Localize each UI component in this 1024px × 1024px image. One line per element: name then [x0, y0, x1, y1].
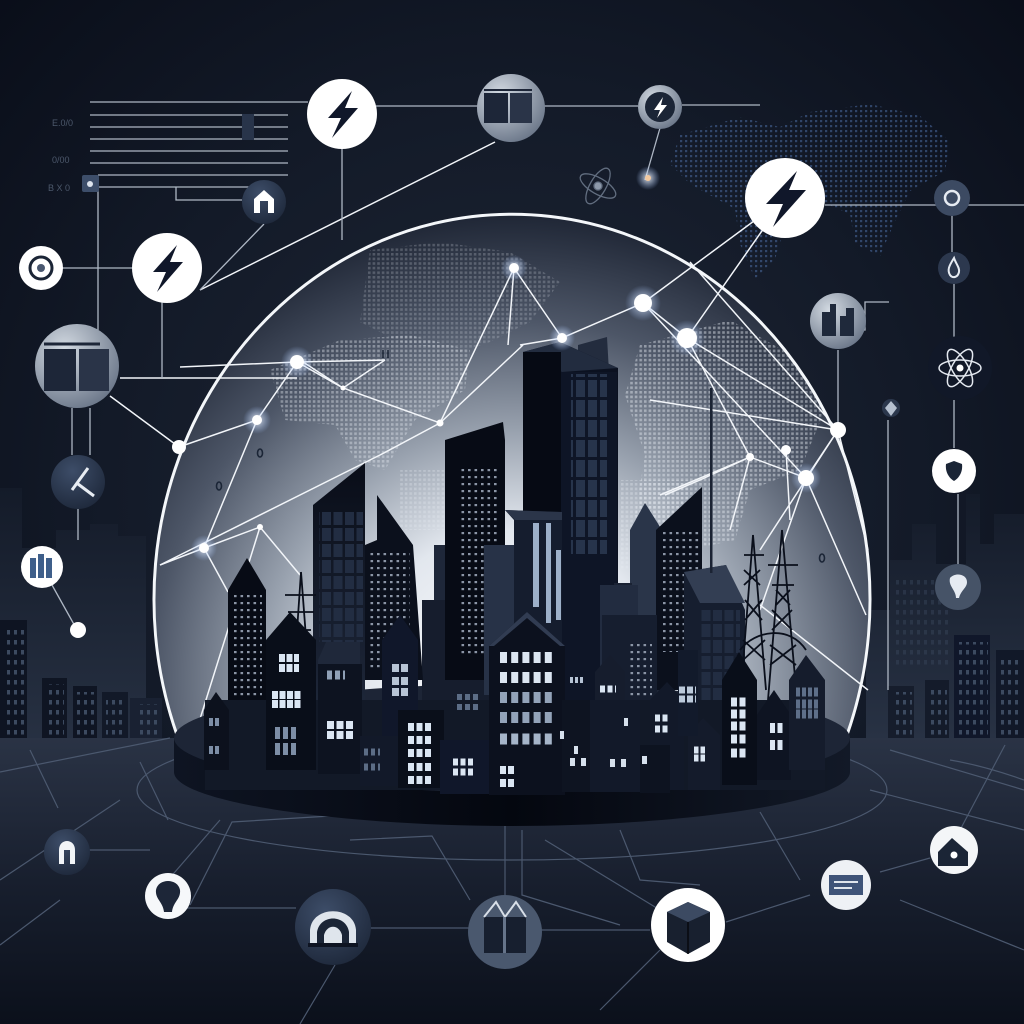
icon: drop badge upper [934, 180, 970, 216]
icon: flame badge [638, 85, 682, 129]
world map: top right [670, 104, 950, 279]
icon: battery badge [21, 546, 63, 588]
icon: white bolt top [307, 79, 377, 149]
icon: drop badge lower [938, 252, 970, 284]
background skyline: right [866, 494, 1024, 740]
icon: large server book [35, 324, 119, 408]
icon: white bolt right [745, 158, 825, 238]
icon: atom badge [928, 336, 992, 400]
icon: message badge [821, 860, 871, 910]
icon: gift box gray [468, 895, 542, 969]
icon: atom small top [577, 165, 619, 207]
ruled legend with small labels: E.0/0 [52, 118, 73, 128]
transmission towers [285, 530, 806, 700]
outer connector lines [52, 102, 1024, 690]
small dome glyphs [216, 350, 824, 562]
icon: box white [651, 888, 725, 962]
tall spike buildings [205, 388, 825, 790]
icon: white bolt left [132, 233, 202, 303]
icon: tool badge [51, 455, 105, 509]
icon: home lock badge [930, 826, 978, 874]
icon: small floating device [882, 399, 900, 417]
network lines inside dome [110, 142, 868, 735]
icon: arch badge [44, 829, 90, 875]
icon: bulb white [145, 873, 191, 919]
icon: target badge [19, 246, 63, 290]
foreground houses and lit windows [204, 612, 825, 795]
ruled legend with small labels [48, 114, 254, 193]
dome rim [154, 214, 870, 735]
icon: bulb badge [935, 564, 981, 610]
icon: home badge [242, 180, 286, 224]
icon: dome gateway [295, 889, 371, 965]
ground plane with street lines [0, 720, 1024, 1024]
icon: server book top [477, 74, 545, 142]
world map dots inside dome [270, 242, 825, 570]
central skyline platform [174, 684, 850, 826]
ruled legend with small labels: B X 0 [48, 183, 70, 193]
glowing network nodes [70, 166, 846, 638]
ruled legend with small labels: 0/00 [52, 155, 70, 165]
lit windows [209, 658, 820, 783]
icon: shield badge [932, 449, 976, 493]
icon: factory badge [810, 293, 866, 349]
glass dome [154, 214, 870, 735]
background skyline: left [0, 488, 162, 760]
tall skyscraper [523, 337, 618, 720]
